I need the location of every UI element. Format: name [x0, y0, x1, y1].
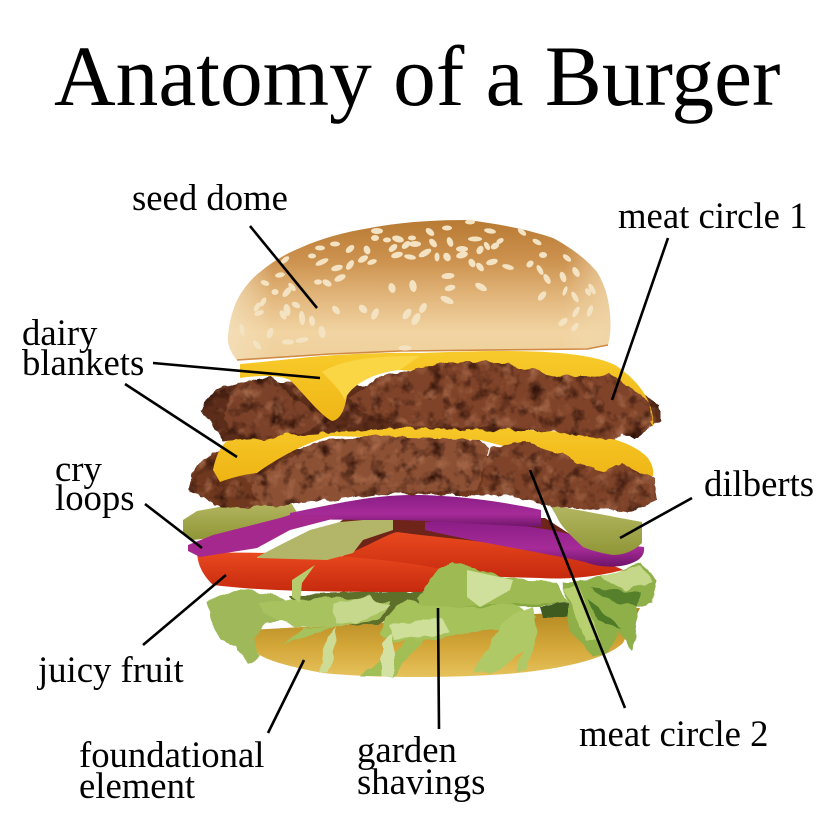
- front tomato slice: [197, 553, 445, 592]
- upper cheese: [240, 351, 653, 426]
- leader lines: [125, 226, 692, 733]
- back tomato slice: [340, 532, 623, 579]
- label: meat circle 2: meat circle 2: [579, 713, 768, 754]
- title: Anatomy of a Burger: [54, 30, 780, 124]
- right pickle: [550, 505, 642, 555]
- label: juicy fruit: juicy fruit: [36, 649, 184, 690]
- label: dairy blankets: dairy: [22, 312, 98, 353]
- label: garden shavings: garden: [357, 729, 457, 770]
- lower patty base: [190, 450, 657, 512]
- small lettuce strand over tomato: [292, 565, 315, 603]
- middle pickle: [257, 520, 393, 560]
- lower cheese: [213, 417, 653, 482]
- label: cry loops: cry: [55, 448, 103, 489]
- label: seed dome: seed dome: [132, 177, 288, 218]
- top bun: [228, 220, 610, 360]
- upper patty left lump: [223, 377, 330, 440]
- left onion: [188, 514, 340, 557]
- onion and tomato shadow: [300, 518, 610, 560]
- upper patty main lump: [347, 362, 653, 440]
- sesame seeds: [239, 220, 597, 351]
- right onion: [425, 521, 644, 567]
- center lettuce over tomato: [417, 562, 567, 607]
- burger illustration: [183, 220, 660, 677]
- label: cry loops: loops: [55, 477, 135, 518]
- label: garden shavings: shavings: [357, 761, 485, 802]
- label: meat circle 1: meat circle 1: [618, 195, 807, 236]
- label: dairy blankets: blankets: [22, 342, 144, 383]
- cheese highlight: [322, 356, 420, 400]
- upper patty back: [200, 382, 660, 440]
- label: foundational element: foundational: [79, 734, 264, 775]
- label: dilberts: dilberts: [704, 463, 814, 504]
- lower patty lump left: [250, 436, 488, 507]
- back pickle: [183, 501, 298, 540]
- lower patty lump right: [480, 440, 657, 512]
- label: foundational element: element: [79, 765, 195, 806]
- shredded lettuce: [208, 562, 657, 677]
- light lettuce patch: [467, 570, 513, 607]
- top onion: [290, 495, 541, 527]
- bottom bun: [250, 608, 640, 677]
